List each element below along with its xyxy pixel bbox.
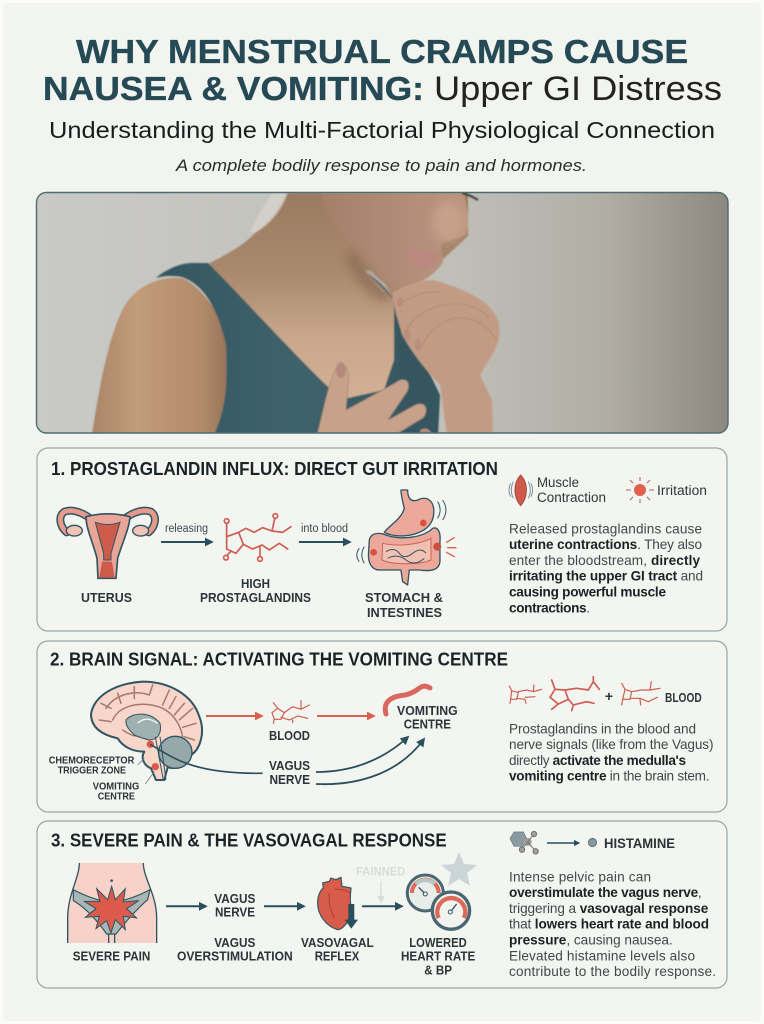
arrow: into blood — [299, 523, 350, 542]
text: section 2 explanation: nerve signals (like from the Vagus) — [509, 737, 714, 752]
arrow: pain to vagus — [166, 905, 206, 907]
label: vagus nerve — [269, 758, 310, 787]
arrow: releasing — [161, 523, 212, 542]
legend: irritation: Irritation — [657, 483, 707, 498]
labels: vomiting centre small: VOMITING — [93, 780, 139, 792]
text: section 2 explanation: vomiting centre in the brain stem. — [509, 769, 710, 784]
arrow: into blood: into blood — [301, 523, 348, 535]
heading 2: 2. BRAIN SIGNAL: ACTIVATING THE VOMITING CENTRE — [50, 649, 508, 669]
label: stomach and intestines: INTESTINES — [367, 605, 442, 620]
label: vagus nerve: VAGUS — [269, 758, 310, 773]
title: WHY MENSTRUAL CRAMPS CAUSE — [76, 33, 688, 70]
photo: woman holding chest and chin — [36, 192, 728, 436]
subtitle: Understanding the Multi-Factorial Physiological Connection — [49, 117, 715, 143]
text: section 1 explanation: causing powerful muscle — [509, 584, 666, 599]
panel: severe pain — [37, 821, 727, 988]
label: vomiting centre — [397, 703, 458, 732]
label: vasovagal reflex — [301, 935, 374, 964]
text: section 1 explanation: uterine contractions. They also — [509, 537, 702, 552]
text: section 3 explanation: contribute to the bodily response. — [509, 964, 716, 979]
label: vagus overstimulation — [177, 935, 293, 964]
label: severe pain: SEVERE PAIN — [73, 949, 150, 964]
text: section 1 explanation: contractions. — [509, 600, 590, 615]
label: vasovagal reflex: VASOVAGAL — [301, 935, 374, 950]
title: Upper GI Distress — [434, 70, 722, 108]
label: high prostaglandins: HIGH — [241, 576, 270, 591]
label: vagus nerve: NERVE — [215, 905, 255, 920]
heading 3: 3. SEVERE PAIN & THE VASOVAGAL RESPONSE — [51, 830, 447, 850]
icon: muscle contraction — [509, 475, 533, 506]
icon: brain — [91, 682, 263, 784]
text: section 3 explanation: Intense pelvic pain can — [509, 869, 651, 884]
legend: muscle contraction: Contraction — [537, 490, 606, 505]
text: section 2 explanation: Prostaglandins in the blood and — [509, 721, 696, 736]
icon: uterus — [60, 511, 155, 578]
arrow: faint down — [380, 881, 382, 902]
text: section 3 explanation: overstimulate the vagus nerve, — [509, 885, 702, 900]
label: blood: BLOOD — [269, 728, 310, 743]
icon: heart with down arrow — [318, 877, 358, 930]
labels: chemoreceptor trigger zone: TRIGGER ZONE — [58, 764, 126, 776]
icon: stomach and intestines — [357, 490, 456, 585]
label: fainted: FAINNED — [356, 864, 406, 878]
label: lowered heart rate and bp: & BP — [424, 962, 452, 977]
icon: pelvis with pain burst — [68, 863, 157, 943]
text: section 1 explanation: irritating the upper GI tract and — [509, 569, 703, 584]
label: vomiting centre: VOMITING — [397, 703, 458, 718]
label: blood small: BLOOD — [665, 690, 702, 705]
icon: molecules plus blood — [509, 677, 660, 711]
label: lowered heart rate and bp: HEART RATE — [401, 949, 476, 964]
arrow: releasing: releasing — [165, 523, 208, 535]
arrows: vagus nerve to vomiting centre — [316, 737, 424, 784]
heading 1: 1. PROSTAGLANDIN INFLUX: DIRECT GUT IRRITATION — [51, 459, 498, 479]
label: lowered heart rate and bp — [401, 935, 476, 977]
label: vagus nerve: VAGUS — [214, 891, 256, 906]
text: section 3 explanation: that lowers heart rate and blood — [509, 917, 709, 932]
text: section 1 explanation: Released prostaglandins cause — [509, 521, 702, 536]
label: vasovagal reflex: REFLEX — [315, 949, 360, 964]
plus sign: + — [605, 688, 613, 704]
text: section 2 explanation — [509, 721, 714, 784]
arrow: heart to gauges — [362, 905, 402, 907]
legend: muscle contraction: Muscle — [537, 475, 579, 490]
icon: histamine molecule — [510, 831, 538, 854]
arrow: blood to vomiting centre — [317, 715, 374, 717]
label: uterus: UTERUS — [81, 590, 132, 605]
icon: vomiting centre squiggle — [385, 686, 430, 714]
labels: vomiting centre small — [93, 780, 139, 803]
icon: blood molecule — [272, 701, 309, 723]
text: section 2 explanation: directly activate the medulla's — [509, 753, 686, 768]
label: high prostaglandins: PROSTAGLANDINS — [200, 590, 311, 605]
label: stomach and intestines: STOMACH & — [365, 590, 443, 605]
label: vagus overstimulation: VAGUS — [214, 935, 256, 950]
label: vomiting centre: CENTRE — [404, 717, 451, 732]
icon: prostaglandin molecule — [224, 514, 291, 561]
label: lowered heart rate and bp: LOWERED — [409, 935, 467, 950]
label: histamine: HISTAMINE — [604, 836, 675, 851]
tagline: A complete bodily response to pain and hormones. — [175, 156, 587, 175]
labels: chemoreceptor trigger zone: CHEMORECEPTOR — [49, 754, 135, 766]
label: vagus nerve — [214, 891, 256, 920]
arrow: vagus to heart — [264, 905, 304, 907]
label: vagus overstimulation: OVERSTIMULATION — [177, 949, 293, 964]
text: section 1 explanation: enter the bloodstream, directly — [509, 553, 700, 568]
label: vagus nerve: NERVE — [270, 772, 310, 787]
text: section 3 explanation: pressure, causing nausea. — [509, 933, 673, 948]
arrow: to histamine — [547, 842, 579, 844]
panel: prostaglandin influx — [37, 448, 727, 631]
text: section 3 explanation: Elevated histamine levels also — [509, 948, 695, 963]
legend: muscle contraction — [537, 475, 606, 505]
label: high prostaglandins — [200, 576, 311, 605]
title: NAUSEA & VOMITING: — [43, 70, 424, 107]
text: section 3 explanation — [509, 869, 716, 979]
title — [43, 33, 722, 108]
icon: gauges — [407, 875, 470, 929]
text: section 3 explanation: triggering a vasovagal response — [509, 901, 709, 916]
labels: vomiting centre small: CENTRE — [98, 791, 135, 803]
label: stomach and intestines — [365, 590, 443, 620]
icon: star — [441, 852, 477, 886]
panel: brain signal — [37, 641, 727, 812]
text: section 1 explanation — [509, 521, 703, 615]
labels: chemoreceptor trigger zone — [49, 754, 135, 776]
arrow: brain to blood — [206, 715, 262, 717]
icon: irritation — [626, 477, 654, 503]
icon: histamine dot — [588, 838, 596, 846]
